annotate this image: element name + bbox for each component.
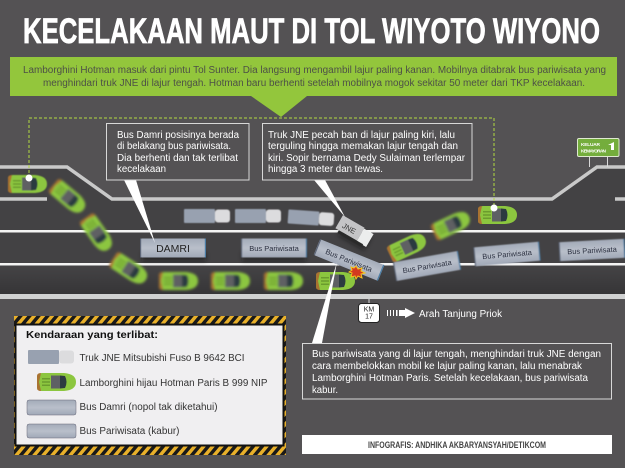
- bus Damri: DAMRI: [156, 243, 190, 255]
- callout: Damri: Bus Damri posisinya berada: [117, 130, 239, 141]
- bus pariwisata 4: Bus Pariwisata: [567, 245, 618, 256]
- explosion icon: [349, 266, 365, 279]
- green summary banner: [10, 57, 617, 117]
- callout: Bus pariwisata: Bus pariwisata yang di lajur tengah, menghindari truk JNE dengan: [312, 349, 601, 360]
- bus pariwisata 1: [241, 238, 307, 261]
- callout: Bus pariwisata: [302, 262, 612, 399]
- callout: Damri: di belakang bus pariwisata.: [117, 141, 231, 152]
- callout: Truk JNE: Truk JNE pecah ban di lajur paling kiri, lalu: [268, 130, 455, 141]
- exit sign: [578, 138, 619, 167]
- summary text: [23, 65, 606, 89]
- callout: Truk JNE: hingga 3 meter dan tewas.: [268, 164, 383, 175]
- legend Damri bus: [27, 400, 218, 415]
- bus pariwisata 4: [559, 239, 625, 261]
- summary text: Lamborghini Hotman masuk dari pintu Tol Sunter. Dia langsung mengambil lajur paling kanan. Mobilnya ditabrak bus pariwisata yang: [23, 65, 606, 76]
- legend car: [37, 373, 268, 391]
- legend panel: [14, 316, 286, 455]
- legend truck: [28, 350, 244, 364]
- dots marking car positions: [26, 174, 498, 212]
- legend tourism bus: [27, 424, 180, 438]
- credit bar: [302, 435, 612, 454]
- callout: Truk JNE: [262, 124, 472, 217]
- exit sign: KELUAR: [581, 142, 601, 148]
- summary text: menghindari truk JNE di lajur tengah. Hotman baru berhenti setelah mobilnya mogok sekitar 50 meter dari TKP kecelakaan.: [43, 78, 585, 89]
- trajectory of Lamborghini: [8, 175, 517, 290]
- bus pariwisata 3: Bus Pariwisata: [482, 248, 533, 261]
- callout: Truk JNE: terguling hingga memakan lajur tengah dan: [268, 141, 458, 152]
- callout: Bus pariwisata: cara membelokkan mobil ke lajur paling kanan, lalu menabrak: [312, 361, 583, 372]
- callout: Truk JNE: kiri. Sopir bernama Dedy Sulaiman terlempar: [268, 153, 466, 164]
- bus pariwisata crash: [314, 239, 384, 281]
- blurred truck path: [184, 209, 334, 227]
- bus pariwisata crash: Bus Pariwisata: [324, 247, 374, 274]
- bus pariwisata 1: Bus Pariwisata: [249, 244, 300, 253]
- callout: Bus pariwisata: kabur.: [312, 385, 338, 396]
- bus pariwisata 2: [393, 251, 461, 281]
- bus Damri: [140, 238, 206, 261]
- KM 17 sign: 17: [365, 314, 373, 320]
- car start: [8, 175, 47, 193]
- legend title: Kendaraan yang terlibat:: [26, 330, 158, 341]
- direction arrow: [387, 308, 415, 318]
- callout: Damri: [106, 124, 249, 243]
- legend truck: Truk JNE Mitsubishi Fuso B 9642 BCI: [80, 353, 244, 364]
- JNE truck overturned: [333, 215, 374, 251]
- road: [0, 167, 625, 299]
- credit bar: INFOGRAFIS: ANDHIKA AKBARYANSYAH/DETIKCOM: [368, 440, 546, 451]
- legend tourism bus: Bus Pariwisata (kabur): [80, 426, 180, 437]
- KM 17 sign: [358, 299, 380, 322]
- JNE truck overturned: JNE: [341, 221, 357, 236]
- dashed connector from banner to car positions: [29, 118, 494, 208]
- bus pariwisata 2: Bus Pariwisata: [402, 258, 453, 275]
- callout: Damri: kecelakaan: [117, 164, 166, 175]
- KM 17 sign: KM: [364, 306, 374, 314]
- legend Damri bus: Bus Damri (nopol tak diketahui): [80, 402, 218, 413]
- callout: Bus pariwisata: Lamborghini Hotman Paris. Setelah kecelakaan, bus pariwisata: [312, 373, 588, 384]
- legend car: Lamborghini hijau Hotman Paris B 999 NIP: [80, 378, 268, 389]
- callout: Damri: Dia berhenti dan tak terlibat: [117, 153, 238, 164]
- exit sign: KEMAYORAN: [581, 148, 607, 154]
- direction label: Arah Tanjung Priok: [419, 309, 503, 320]
- bus pariwisata 3: [473, 242, 541, 266]
